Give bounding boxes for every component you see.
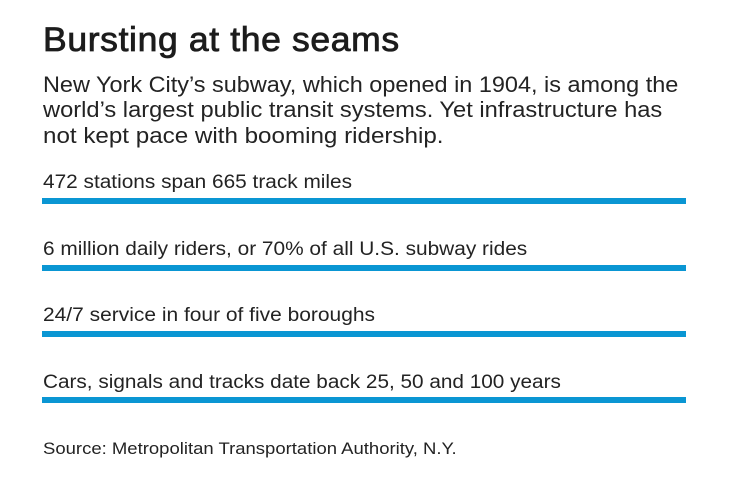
title: Bursting at the seams: [43, 21, 400, 59]
fact row: stations: [42, 172, 686, 204]
fact row: riders: 6 million daily riders, or 70% of all U.S. subway rides: [43, 239, 527, 260]
fact row: age: Cars, signals and tracks date back 25, 50 and 100 years: [43, 372, 561, 393]
fact row: stations: 472 stations span 665 track miles: [43, 172, 352, 193]
intro text: New York City’s subway, which opened in 1904, is among the: [43, 72, 678, 97]
fact row: service: 24/7 service in four of five boroughs: [43, 305, 375, 326]
intro text: world’s largest public transit systems. Yet infrastructure has: [43, 97, 662, 122]
fact row: service: [42, 305, 686, 337]
intro text: [43, 72, 678, 148]
source note: Source: Metropolitan Transportation Authority, N.Y.: [43, 438, 457, 458]
fact row: age: [42, 372, 686, 403]
intro text: not kept pace with booming ridership.: [43, 123, 444, 148]
fact row: riders: [42, 239, 686, 271]
